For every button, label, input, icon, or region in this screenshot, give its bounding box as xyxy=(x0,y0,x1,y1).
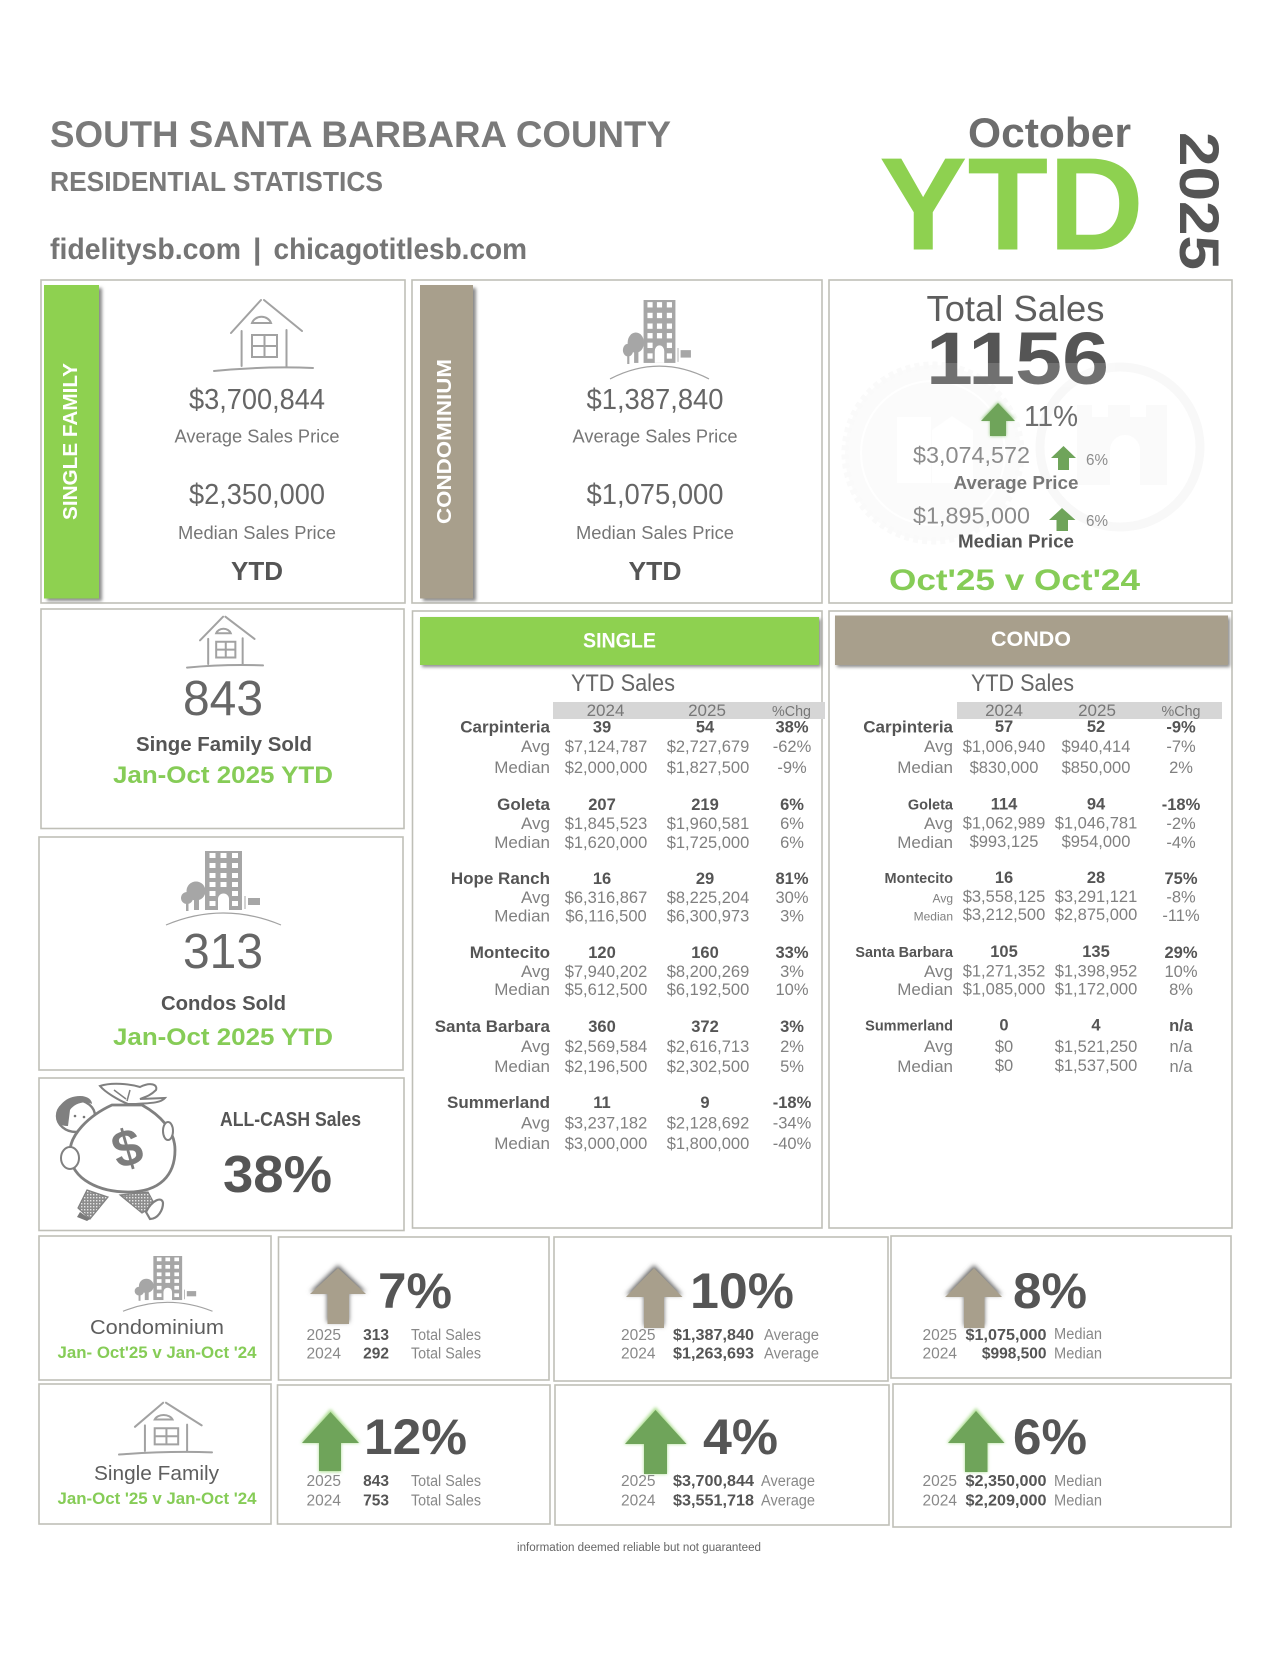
rows: Santa Barbara: 10% xyxy=(1164,963,1198,981)
rows: Carpinteria: -62% xyxy=(773,738,812,756)
rows: Montecito: $7,940,202 xyxy=(565,963,647,981)
average price label: Average Price xyxy=(954,472,1078,493)
median price value: $1,895,000 xyxy=(913,502,1030,528)
stat lines: Median xyxy=(1054,1492,1102,1510)
rows: Summerland: 11 xyxy=(593,1094,611,1112)
rows: Santa Barbara: Santa Barbara xyxy=(435,1017,551,1036)
stat lines: $2,209,000 xyxy=(966,1492,1046,1510)
rows: Carpinteria: 38% xyxy=(775,718,809,736)
condo count: 313 xyxy=(183,925,263,979)
stat lines: 2024 xyxy=(621,1346,656,1362)
rows: Montecito: $3,291,121 xyxy=(1055,888,1137,906)
stat lines: 2024 xyxy=(922,1492,957,1510)
condos sold label: Condos Sold xyxy=(161,993,286,1015)
watermark seal xyxy=(845,365,1200,541)
rows: Carpinteria: Median xyxy=(897,758,953,777)
panel: condo median change xyxy=(891,1236,1231,1378)
rows: Carpinteria: $1,827,500 xyxy=(667,759,749,777)
rows: Santa Barbara: 29% xyxy=(1164,944,1198,962)
stat lines: Total Sales xyxy=(411,1473,481,1490)
rows: Goleta: 6% xyxy=(780,796,804,814)
panel: single total sales change xyxy=(278,1385,550,1524)
rows: Montecito: $6,192,500 xyxy=(667,981,749,999)
website links: | xyxy=(253,233,261,266)
table header: %Chg xyxy=(1162,703,1200,720)
stat lines: 2025 xyxy=(922,1473,957,1490)
rows: Santa Barbara: 105 xyxy=(990,943,1018,961)
banner: single xyxy=(420,617,821,667)
rows: Summerland: $3,237,182 xyxy=(565,1114,647,1132)
banner: condo xyxy=(835,616,1230,667)
rows: Summerland: Summerland xyxy=(447,1093,550,1112)
rows: Montecito: $2,875,000 xyxy=(1055,906,1137,924)
panel: all-cash sales xyxy=(39,1078,404,1230)
icon: condo building xyxy=(610,300,709,379)
arrow: tan up xyxy=(626,1265,682,1328)
title: SOUTH SANTA BARBARA COUNTY xyxy=(50,114,671,155)
icon: man carrying money bag: $ xyxy=(105,1117,149,1181)
rows: Montecito: 10% xyxy=(775,981,809,999)
rows: Goleta: Median xyxy=(494,833,550,852)
stat lines: 2024 xyxy=(306,1492,341,1510)
rows: Carpinteria: -9% xyxy=(777,759,807,777)
panel: condo average change xyxy=(554,1237,888,1381)
rows: Goleta: -4% xyxy=(1166,834,1196,852)
table header: 2025 xyxy=(688,701,726,720)
rows: Santa Barbara: $2,196,500 xyxy=(565,1058,647,1076)
rows: Montecito xyxy=(885,869,1200,925)
stat lines: 313 xyxy=(363,1327,389,1344)
percent: 10% xyxy=(690,1263,794,1319)
website links: fidelitysb.com xyxy=(50,233,241,266)
table header xyxy=(553,701,825,720)
rows: Goleta: 114 xyxy=(991,796,1018,814)
panel: single median change xyxy=(893,1384,1231,1527)
rows: Goleta: $1,062,989 xyxy=(963,814,1045,832)
rows: Summerland: Avg xyxy=(924,1037,953,1056)
arrow: green up xyxy=(947,1408,1005,1472)
rows: Hope Ranch: $6,116,500 xyxy=(565,908,647,926)
median sales price: Median Sales Price xyxy=(576,523,734,543)
rows: Santa Barbara: $1,172,000 xyxy=(1055,980,1137,998)
rows: Santa Barbara: $2,569,584 xyxy=(565,1038,647,1056)
stat lines: $2,350,000 xyxy=(966,1473,1046,1490)
condominium period: Jan- Oct'25 v Jan-Oct '24 xyxy=(58,1343,257,1362)
rows: Summerland: Summerland xyxy=(865,1018,953,1034)
panel: condos sold xyxy=(39,837,403,1070)
month heading: October xyxy=(968,109,1131,156)
table header: %Chg xyxy=(772,703,811,720)
rows: Summerland xyxy=(865,1016,1194,1076)
panel: single average change xyxy=(555,1385,889,1525)
rows: Montecito: 120 xyxy=(588,944,616,962)
rows: Santa Barbara: 2% xyxy=(780,1038,804,1056)
stat lines: $1,387,840 xyxy=(673,1327,754,1344)
rows: Santa Barbara: 8% xyxy=(1169,981,1193,999)
rows: Hope Ranch xyxy=(451,869,809,926)
stat lines: Median xyxy=(1054,1326,1102,1343)
average sales price xyxy=(174,384,340,446)
rows: Montecito: 3% xyxy=(780,963,804,981)
average sales price: Average Sales Price xyxy=(174,426,340,446)
rows: Montecito: $3,558,125 xyxy=(963,888,1045,906)
rows: Santa Barbara: Avg xyxy=(924,962,953,981)
panel: condo total sales change xyxy=(278,1237,549,1380)
rows: Goleta: -18% xyxy=(1162,796,1201,814)
single family period: Jan-Oct '25 v Jan-Oct '24 xyxy=(58,1489,257,1508)
single family label: Single Family xyxy=(94,1462,220,1485)
table header: 2025 xyxy=(1078,701,1116,720)
rows: Summerland: n/a xyxy=(1170,1058,1193,1076)
panel: single family comparison label xyxy=(39,1384,271,1524)
arrow: green up xyxy=(624,1407,687,1474)
rows: Montecito: 16 xyxy=(995,869,1013,887)
rows: Santa Barbara: 135 xyxy=(1082,943,1110,961)
stat lines: Total Sales xyxy=(411,1492,481,1510)
rows: Goleta: $1,845,523 xyxy=(565,815,647,833)
stat lines: Average xyxy=(761,1492,815,1510)
rows: Carpinteria: -9% xyxy=(1166,718,1196,736)
arrow: tan up xyxy=(310,1265,366,1324)
average sales price xyxy=(572,384,738,446)
rows: Summerland xyxy=(447,1093,812,1153)
YTD label: YTD xyxy=(231,556,283,586)
rows: Hope Ranch: 81% xyxy=(775,870,809,888)
median price change: 6% xyxy=(1086,513,1108,530)
rows: Goleta: $1,960,581 xyxy=(667,815,749,833)
median sales price xyxy=(576,479,734,543)
rows: Summerland: -18% xyxy=(773,1094,812,1112)
rows: Summerland: Median xyxy=(494,1134,550,1153)
website links: chicagotitlesb.com xyxy=(274,233,527,266)
median sales price: $2,350,000 xyxy=(189,479,325,511)
arrow: average price up xyxy=(1051,446,1076,470)
stat lines: 2025 xyxy=(922,1327,957,1344)
rows: Carpinteria xyxy=(863,718,1196,777)
rows: Goleta: Goleta xyxy=(497,795,551,814)
rows: Carpinteria: $850,000 xyxy=(1062,759,1130,777)
rows: Hope Ranch: Hope Ranch xyxy=(451,869,550,888)
icon: man carrying money bag xyxy=(57,1084,175,1221)
YTD label: YTD xyxy=(628,556,682,586)
rows: Summerland: -34% xyxy=(773,1114,812,1132)
rows: Hope Ranch: 16 xyxy=(593,870,611,888)
rows: Goleta: $954,000 xyxy=(1062,833,1130,851)
rows: Carpinteria: $1,006,940 xyxy=(963,738,1045,756)
panel: condominium comparison label xyxy=(39,1236,271,1380)
single family sold label: Singe Family Sold xyxy=(136,734,312,756)
rows: Hope Ranch: $8,225,204 xyxy=(667,889,749,907)
rows: Summerland: 9 xyxy=(700,1094,710,1112)
disclaimer: information deemed reliable but not guaranteed xyxy=(517,1542,761,1554)
rows: Santa Barbara: 360 xyxy=(588,1018,616,1036)
rows: Montecito: -11% xyxy=(1162,907,1200,925)
side banner: single family xyxy=(44,285,102,601)
rows: Santa Barbara: Median xyxy=(897,980,953,999)
rows: Carpinteria: -7% xyxy=(1166,738,1196,756)
rows: Summerland: Median xyxy=(897,1057,953,1076)
percent: 12% xyxy=(364,1409,467,1465)
arrow: green up xyxy=(301,1409,360,1472)
rows: Carpinteria: $940,414 xyxy=(1062,738,1130,756)
rows: Goleta: 94 xyxy=(1087,796,1106,814)
rows: Carpinteria: Avg xyxy=(924,737,953,756)
rows: Santa Barbara: 5% xyxy=(780,1058,804,1076)
panel: single family sold xyxy=(41,609,404,828)
average price value: $3,074,572 xyxy=(913,442,1030,468)
stat lines: 753 xyxy=(363,1492,389,1510)
rows: Hope Ranch: 30% xyxy=(775,889,809,907)
panel: single YTD table xyxy=(412,611,825,1228)
rows: Carpinteria: $2,727,679 xyxy=(667,738,749,756)
rows: Summerland: $0 xyxy=(995,1057,1013,1075)
stat lines: Total Sales xyxy=(411,1346,481,1362)
year vertical label: 2025 xyxy=(1168,132,1231,270)
rows: Summerland: $1,800,000 xyxy=(667,1135,749,1153)
rows: Goleta: 219 xyxy=(691,796,719,814)
average price change: 6% xyxy=(1086,452,1108,469)
table title: YTD Sales xyxy=(971,670,1074,697)
rows: Santa Barbara: $1,398,952 xyxy=(1055,962,1137,980)
side banner: single family: SINGLE FAMILY xyxy=(60,362,82,520)
condominium label: Condominium xyxy=(90,1316,224,1339)
stat lines: Average xyxy=(764,1327,819,1344)
rows: Goleta: Avg xyxy=(521,814,550,833)
stat lines: 2024 xyxy=(922,1346,957,1362)
total sales number: 1156 xyxy=(926,317,1109,400)
stat lines: 292 xyxy=(363,1346,389,1362)
rows: Carpinteria: 2% xyxy=(1169,759,1193,777)
rows: Santa Barbara xyxy=(855,943,1198,999)
rows: Montecito: Avg xyxy=(521,962,550,981)
percent: 7% xyxy=(378,1263,452,1319)
stat lines xyxy=(306,1473,481,1510)
rows: Goleta: $1,046,781 xyxy=(1055,814,1137,832)
rows: Santa Barbara: 3% xyxy=(780,1018,804,1036)
rows: Carpinteria: 57 xyxy=(995,718,1013,736)
all-cash percent: 38% xyxy=(223,1146,332,1204)
comparison period: Oct'25 v Oct'24 xyxy=(889,564,1140,597)
panel: condo YTD table xyxy=(829,611,1232,1228)
subtitle: RESIDENTIAL STATISTICS xyxy=(50,166,383,197)
rows: Montecito: Montecito xyxy=(470,943,550,962)
rows: Montecito: 28 xyxy=(1087,869,1105,887)
rows: Montecito: $3,212,500 xyxy=(963,906,1045,924)
stat lines: 2025 xyxy=(621,1473,655,1490)
rows: Montecito: 33% xyxy=(775,944,809,962)
rows: Goleta: $993,125 xyxy=(970,833,1038,851)
table header xyxy=(957,701,1222,720)
rows: Santa Barbara: Avg xyxy=(521,1037,550,1056)
rows: Carpinteria: $7,124,787 xyxy=(565,738,647,756)
percent: 8% xyxy=(1013,1263,1087,1319)
side banner: condominium xyxy=(420,285,476,601)
table header: 2024 xyxy=(985,701,1023,720)
icon: house xyxy=(119,1403,212,1455)
stat lines: 2025 xyxy=(621,1327,655,1344)
rows: Summerland: 0 xyxy=(999,1016,1009,1034)
rows: Goleta: $1,620,000 xyxy=(565,834,647,852)
rows: Montecito: 160 xyxy=(691,944,719,962)
side banner: condominium: CONDOMINIUM xyxy=(434,359,456,524)
stat lines: $3,551,718 xyxy=(673,1492,754,1510)
icon: house xyxy=(187,617,263,668)
stat lines: Median xyxy=(1054,1346,1102,1362)
banner: single: SINGLE xyxy=(583,630,656,652)
stat lines: $3,700,844 xyxy=(673,1473,754,1490)
rows: Santa Barbara: $1,085,000 xyxy=(963,980,1045,998)
rows: Montecito: $8,200,269 xyxy=(667,963,749,981)
rows: Santa Barbara xyxy=(435,1017,804,1076)
stat lines: $998,500 xyxy=(982,1346,1046,1362)
rows: Carpinteria xyxy=(460,718,812,777)
stat lines xyxy=(922,1326,1102,1362)
panel: total sales xyxy=(829,280,1232,603)
rows: Montecito: Median xyxy=(494,980,550,999)
website links xyxy=(50,233,527,266)
median sales price: Median Sales Price xyxy=(178,523,336,543)
table title: YTD Sales xyxy=(571,670,675,697)
stat lines: 2024 xyxy=(621,1492,656,1510)
rows: Goleta xyxy=(494,795,804,852)
rows: Montecito xyxy=(470,943,809,999)
all-cash label: ALL-CASH Sales xyxy=(220,1109,361,1131)
rows: Montecito: -8% xyxy=(1166,888,1196,906)
rows: Carpinteria: Avg xyxy=(521,737,550,756)
stat lines: Average xyxy=(761,1473,815,1490)
rows: Montecito: Montecito xyxy=(885,871,953,887)
rows: Summerland: $2,128,692 xyxy=(667,1114,749,1132)
YTD heading: YTD xyxy=(879,130,1144,278)
rows: Summerland: n/a xyxy=(1169,1017,1194,1035)
rows: Santa Barbara: $1,271,352 xyxy=(963,962,1045,980)
median sales price: $1,075,000 xyxy=(586,479,724,511)
rows: Montecito: Avg xyxy=(933,892,953,906)
stat lines: 2025 xyxy=(306,1473,341,1490)
stat lines: $1,263,693 xyxy=(673,1346,754,1362)
stat lines: Median xyxy=(1054,1473,1102,1490)
banner: condo: CONDO xyxy=(991,628,1071,651)
rows: Goleta: Goleta xyxy=(908,798,954,814)
rows: Goleta: 6% xyxy=(780,815,804,833)
single family count: 843 xyxy=(183,672,263,726)
rows: Summerland: $0 xyxy=(995,1038,1013,1056)
stat lines: Total Sales xyxy=(411,1327,481,1344)
rows: Summerland: 4 xyxy=(1091,1016,1101,1034)
rows: Carpinteria: Carpinteria xyxy=(863,718,954,736)
rows: Summerland: $3,000,000 xyxy=(565,1135,647,1153)
rows: Summerland: Avg xyxy=(521,1114,550,1132)
rows: Goleta: Median xyxy=(897,833,953,852)
single family period: Jan-Oct 2025 YTD xyxy=(113,762,333,789)
rows: Hope Ranch: Avg xyxy=(521,888,550,907)
rows: Summerland: $1,521,250 xyxy=(1055,1038,1137,1056)
median sales price xyxy=(178,479,336,543)
rows: Carpinteria: 54 xyxy=(696,718,715,736)
rows: Summerland: n/a xyxy=(1170,1038,1193,1056)
average sales price: Average Sales Price xyxy=(572,426,738,446)
rows: Carpinteria: $2,000,000 xyxy=(565,759,647,777)
rows: Goleta: -2% xyxy=(1166,815,1196,833)
rows: Santa Barbara: $2,302,500 xyxy=(667,1058,749,1076)
rows: Hope Ranch: 29 xyxy=(696,870,714,888)
stat lines xyxy=(922,1473,1102,1510)
median price label: Median Price xyxy=(958,530,1074,552)
icon: house xyxy=(214,300,313,371)
rows: Goleta: Avg xyxy=(924,814,953,833)
arrow: total sales up xyxy=(981,402,1015,436)
rows: Goleta: $1,725,000 xyxy=(667,834,749,852)
rows: Goleta xyxy=(897,796,1201,852)
rows: Carpinteria: $830,000 xyxy=(970,759,1038,777)
stat lines xyxy=(306,1327,481,1362)
stat lines: 2025 xyxy=(306,1327,341,1344)
rows: Hope Ranch: $6,300,973 xyxy=(667,908,749,926)
stat lines: 2024 xyxy=(306,1346,341,1362)
arrow: tan up xyxy=(945,1265,1002,1328)
rows: Santa Barbara: Santa Barbara xyxy=(855,945,954,961)
stat lines: 843 xyxy=(363,1473,389,1490)
rows: Summerland: -40% xyxy=(773,1135,812,1153)
total sales heading: Total Sales xyxy=(926,288,1104,329)
rows: Goleta: 6% xyxy=(780,834,804,852)
panel: condominium summary xyxy=(412,280,822,603)
rows: Goleta: 207 xyxy=(588,796,616,814)
rows: Santa Barbara: 372 xyxy=(691,1018,719,1036)
rows: Santa Barbara: $2,616,713 xyxy=(667,1038,749,1056)
icon: condo building xyxy=(123,1256,212,1311)
rows: Santa Barbara: Median xyxy=(494,1057,550,1076)
rows: Carpinteria: Median xyxy=(494,758,550,777)
average sales price: $3,700,844 xyxy=(189,384,325,416)
condo period: Jan-Oct 2025 YTD xyxy=(113,1024,333,1051)
stat lines: $1,075,000 xyxy=(966,1327,1046,1344)
rows: Carpinteria: Carpinteria xyxy=(460,718,551,736)
table header: 2024 xyxy=(587,701,624,720)
rows: Summerland: $1,537,500 xyxy=(1055,1057,1137,1075)
rows: Carpinteria: 39 xyxy=(593,718,611,736)
stat lines xyxy=(621,1327,819,1362)
percent: 6% xyxy=(1013,1409,1087,1465)
arrow: median price up xyxy=(1049,508,1076,531)
icon: condo building xyxy=(166,851,281,925)
average sales price: $1,387,840 xyxy=(586,384,724,416)
stat lines xyxy=(621,1473,815,1510)
percent: 4% xyxy=(703,1409,778,1465)
rows: Hope Ranch: 3% xyxy=(780,908,804,926)
rows: Hope Ranch: $6,316,867 xyxy=(565,889,647,907)
rows: Montecito: $5,612,500 xyxy=(565,981,647,999)
panel: single family summary xyxy=(41,280,405,603)
rows: Montecito: Median xyxy=(914,910,953,924)
stat lines: Average xyxy=(764,1346,819,1362)
rows: Montecito: 75% xyxy=(1164,870,1198,888)
rows: Hope Ranch: Median xyxy=(494,906,550,926)
rows: Carpinteria: 52 xyxy=(1087,718,1105,736)
total sales change: 11% xyxy=(1024,401,1078,433)
